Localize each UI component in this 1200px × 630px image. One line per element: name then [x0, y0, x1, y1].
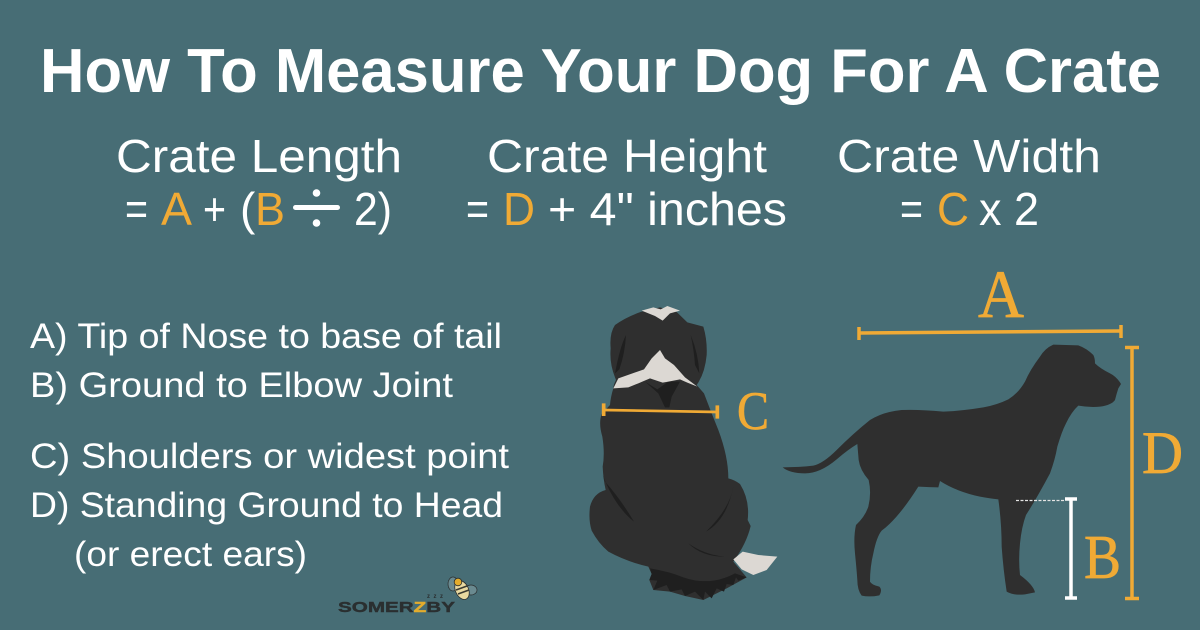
dog body — [589, 307, 751, 600]
formula: crate width: C — [937, 183, 969, 235]
white fur patches — [613, 306, 777, 575]
measurement list — [30, 317, 509, 574]
formula: crate length: Crate Length — [116, 130, 402, 182]
title: How To Measure Your Dog For A Crate — [40, 37, 1161, 106]
formula: crate height: Crate Height — [487, 130, 767, 182]
formula: crate width: Crate Width — [837, 130, 1101, 182]
formula: crate height: = — [466, 183, 489, 235]
formula: crate length: ( — [240, 183, 256, 235]
formula: crate length: + — [203, 183, 226, 235]
logo: Somerzby: SOMER ZBY — [338, 599, 455, 616]
formula: crate length: A — [161, 183, 192, 235]
formula: crate length: = — [125, 183, 148, 235]
measurement list: (or erect ears) — [74, 535, 307, 574]
measure line B — [1016, 499, 1077, 598]
measurement list: A) Tip of Nose to base of tail — [30, 317, 502, 356]
label B: B — [1084, 524, 1121, 592]
logo: Somerzby — [338, 577, 477, 616]
measure line D — [1125, 346, 1139, 599]
formula: crate height: D — [503, 183, 535, 235]
measurement list: C) Shoulders or widest point — [30, 437, 509, 476]
formula: crate length: B — [255, 183, 285, 235]
label A: A — [978, 256, 1024, 332]
formula: crate width: x 2 — [979, 183, 1039, 235]
formula: crate height: + 4" inches — [548, 183, 787, 235]
measure line C — [603, 403, 717, 419]
icon: bee — [448, 577, 477, 602]
dark fur accents — [603, 335, 747, 600]
illustration: dog seen from behind — [589, 306, 777, 600]
formula: crate length: 2) — [354, 183, 392, 235]
measurement list: D) Standing Ground to Head — [30, 486, 503, 525]
label C: C — [737, 381, 769, 441]
label D: D — [1142, 420, 1183, 486]
measure line A — [859, 325, 1121, 340]
formula: crate height — [466, 130, 787, 235]
measurement list: B) Ground to Elbow Joint — [30, 366, 453, 405]
formula: crate width — [837, 130, 1101, 235]
formula: crate length — [116, 130, 402, 235]
logo: Somerzby: z z z — [427, 594, 443, 600]
formula: crate width: = — [900, 183, 923, 235]
illustration: dog side silhouette — [783, 345, 1121, 596]
